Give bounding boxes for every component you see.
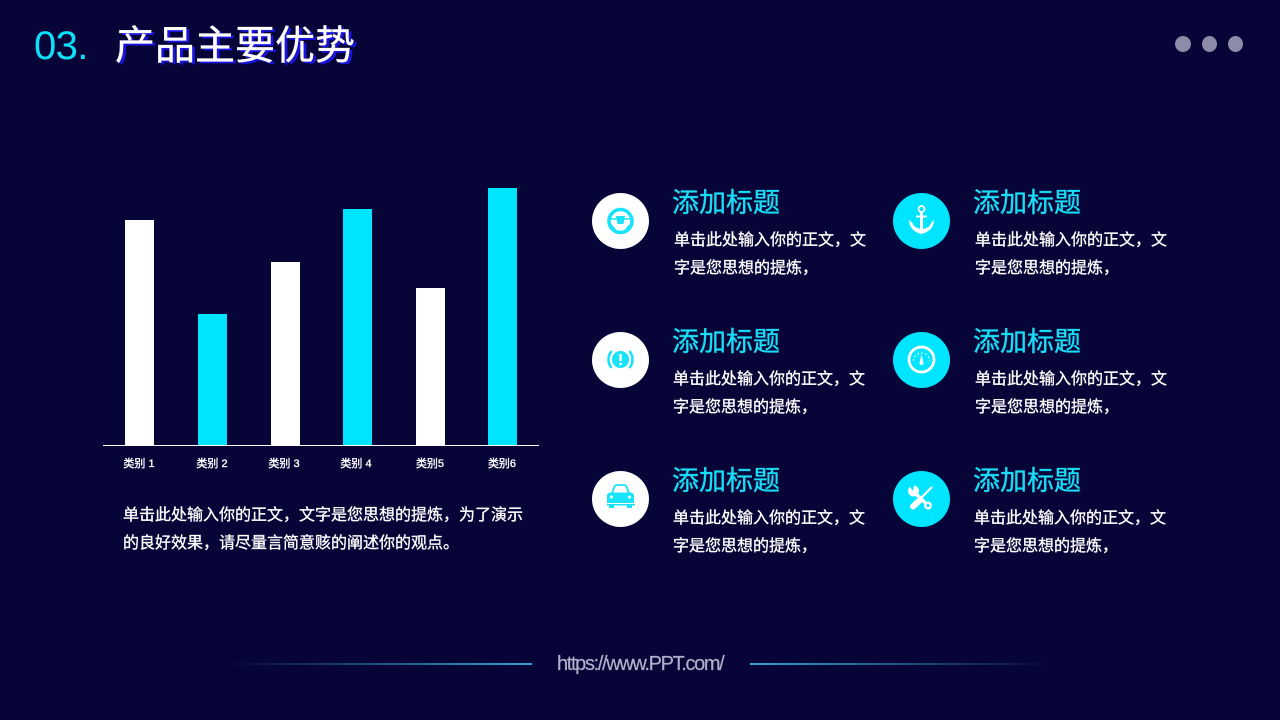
icon: brake warning: [592, 332, 649, 388]
item 4: gauge: [893, 327, 1167, 416]
bar chart: 类别5: [416, 458, 444, 470]
item 2: anchor: [893, 188, 1167, 277]
body text: [975, 231, 1167, 277]
item 5: car: [592, 466, 865, 555]
chart description: 单击此处输入你的正文，文字是您思想的提炼，为了演示: [123, 507, 523, 524]
bar chart: 类别 3: [268, 458, 300, 470]
body text: [673, 370, 865, 416]
icon: steering wheel: [592, 193, 649, 249]
heading: 添加标题: [672, 466, 780, 496]
icon: gauge: [893, 332, 950, 388]
item 3: brake warning: [592, 327, 865, 416]
heading: 添加标题: [973, 466, 1081, 496]
title: 产品主要优势: [115, 24, 355, 68]
body text: 字是您思想的提炼，: [974, 538, 1118, 555]
body text: 字是您思想的提炼，: [674, 260, 818, 277]
heading: 添加标题: [973, 188, 1081, 218]
heading: 添加标题: [672, 327, 780, 357]
heading: 添加标题: [672, 188, 780, 218]
item 6: tools: [893, 466, 1166, 555]
body text: [674, 231, 866, 277]
bar chart: 类别 1: [123, 458, 155, 470]
footer url: https://www.PPT.com/: [557, 653, 723, 675]
bar chart: [103, 188, 539, 470]
chart description: [123, 506, 523, 552]
body text: 单击此处输入你的正文，文: [974, 510, 1166, 527]
bar chart: 类别6: [488, 458, 516, 470]
body text: 字是您思想的提炼，: [673, 538, 817, 555]
body text: 字是您思想的提炼，: [975, 399, 1119, 416]
body text: [673, 509, 865, 555]
window dots: [1175, 36, 1243, 52]
body text: 单击此处输入你的正文，文: [673, 371, 865, 388]
bar chart: 类别 4: [340, 458, 372, 470]
body text: [974, 509, 1166, 555]
body text: 单击此处输入你的正文，文: [975, 232, 1167, 249]
heading: 添加标题: [973, 327, 1081, 357]
footer left line: [228, 663, 532, 665]
section number: 03.: [34, 24, 88, 68]
body text: 字是您思想的提炼，: [975, 260, 1119, 277]
body text: 字是您思想的提炼，: [673, 399, 817, 416]
icon: anchor: [893, 193, 950, 249]
footer right line: [750, 663, 1054, 665]
body text: 单击此处输入你的正文，文: [673, 510, 865, 527]
chart description: 的良好效果，请尽量言简意赅的阐述你的观点。: [123, 535, 459, 552]
bar chart: 类别 2: [196, 458, 228, 470]
body text: 单击此处输入你的正文，文: [674, 232, 866, 249]
icon: tools: [893, 471, 950, 527]
body text: [975, 370, 1167, 416]
body text: 单击此处输入你的正文，文: [975, 371, 1167, 388]
item 1: steering wheel: [592, 188, 866, 277]
icon: car: [592, 471, 649, 527]
